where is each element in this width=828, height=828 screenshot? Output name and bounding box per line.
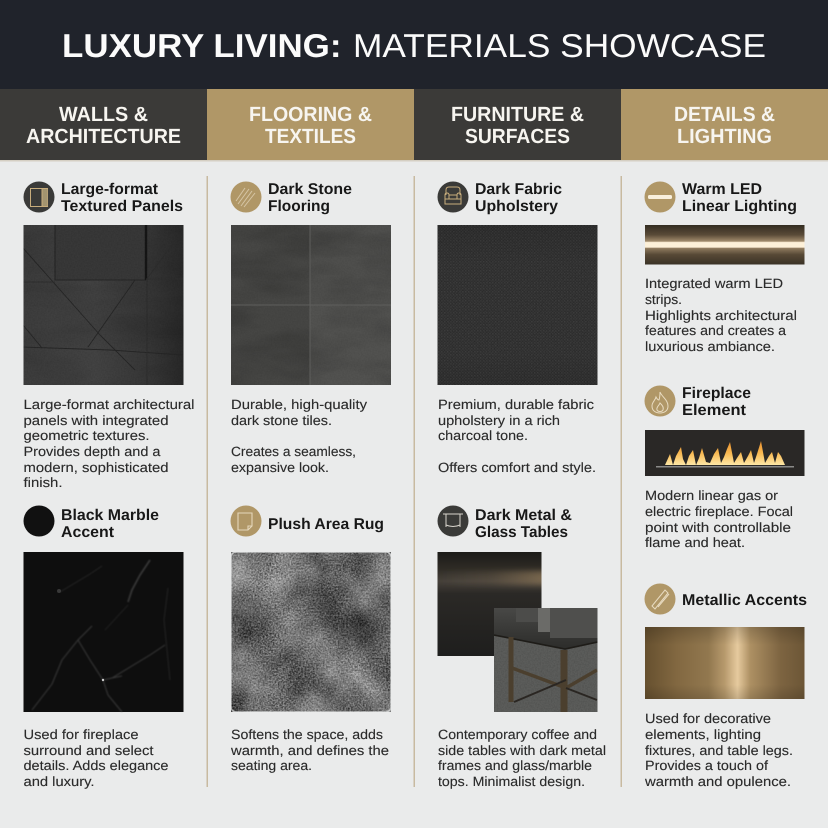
description: point with controllable (645, 520, 791, 535)
description: side tables with dark metal (438, 743, 606, 758)
title: LUXURY LIVING: (62, 27, 342, 64)
description: surround and select (24, 743, 154, 758)
description: seating area. (231, 758, 312, 773)
description: luxurious ambiance. (645, 339, 775, 354)
description (644, 711, 793, 789)
column header: furniture and surfaces (414, 89, 621, 160)
material swatch: dark metal (438, 552, 548, 656)
heading: Textured Panels (61, 198, 183, 215)
column header: flooring and textiles: TEXTILES (265, 125, 356, 148)
description: charcoal tone. (438, 428, 528, 443)
heading (61, 181, 183, 215)
column header: flooring and textiles (207, 89, 414, 160)
heading: Upholstery (475, 198, 558, 215)
panel: warm LED linear lighting (644, 181, 804, 354)
description: Softens the space, adds (231, 727, 383, 742)
heading: Flooring (268, 198, 330, 215)
heading (682, 385, 751, 419)
icon: stone (230, 182, 262, 212)
description (438, 397, 596, 475)
heading: Dark Metal & (475, 507, 572, 524)
description: Used for fireplace (24, 727, 138, 742)
icon: metal rods (644, 584, 676, 614)
column header: flooring and textiles: FLOORING & (249, 103, 372, 126)
description: tops. Minimalist design. (438, 774, 585, 789)
heading: Linear Lighting (682, 198, 797, 215)
description (645, 488, 793, 550)
icon: LED bar (644, 182, 676, 212)
panel: black marble accent (24, 506, 184, 789)
photo: glass table (494, 608, 598, 712)
icon: marble (24, 506, 54, 536)
column header: walls and architecture: WALLS & (59, 103, 148, 126)
column header: furniture and surfaces: SURFACES (465, 125, 570, 148)
description: warmth, and defines the (230, 743, 389, 758)
heading (475, 507, 572, 541)
material swatch: LED strip (645, 225, 804, 264)
material swatch: fabric (438, 225, 598, 385)
description: dark stone tiles. (231, 413, 332, 428)
column header: furniture and surfaces: FURNITURE & (451, 103, 584, 126)
description: Provides a touch of (645, 758, 768, 773)
panel: fireplace element (644, 385, 804, 550)
description: modern, sophisticated (24, 460, 168, 475)
heading: Plush Area Rug (268, 516, 384, 533)
heading: Glass Tables (475, 524, 568, 541)
panel: metallic accents (644, 584, 807, 789)
heading: Element (682, 402, 746, 419)
description: Modern linear gas or (645, 488, 779, 503)
description: Offers comfort and style. (438, 460, 596, 475)
description: Integrated warm LED (645, 276, 783, 291)
panel: large-format textured panels (23, 181, 195, 490)
icon: sofa (438, 182, 468, 212)
description: and luxury. (24, 774, 94, 789)
heading: Metallic Accents (682, 592, 807, 609)
description: Premium, durable fabric (438, 397, 594, 412)
material swatch: rug (231, 552, 391, 712)
material swatch: brushed bronze (645, 627, 804, 699)
description: expansive look. (231, 460, 329, 475)
material swatch: fireplace (645, 430, 804, 476)
column header: details and lighting (621, 89, 828, 160)
description: Creates a seamless, (231, 444, 356, 459)
description: frames and glass/marble (438, 758, 592, 773)
heading (61, 507, 159, 541)
description: Highlights architectural (645, 308, 797, 323)
description: Contemporary coffee and (438, 727, 597, 742)
column header: details and lighting: DETAILS & (674, 103, 775, 126)
description (24, 397, 195, 490)
description: Used for decorative (645, 711, 771, 726)
description (231, 397, 367, 475)
panel: dark stone flooring (230, 181, 391, 475)
description: features and creates a (645, 323, 787, 338)
description: panels with integrated (24, 413, 168, 428)
description: Durable, high-quality (231, 397, 367, 412)
description (24, 727, 168, 789)
title banner (0, 0, 828, 89)
description: strips. (645, 292, 682, 307)
icon: rug (230, 506, 262, 536)
description: upholstery in a rich (438, 413, 560, 428)
title: MATERIALS SHOWCASE (353, 27, 766, 64)
description: electric fireplace. Focal (645, 504, 793, 519)
icon: panel (24, 182, 54, 212)
title (62, 27, 766, 64)
panel: dark metal and glass tables (438, 506, 606, 789)
heading: Accent (61, 524, 114, 541)
heading: Black Marble (61, 507, 159, 524)
heading (268, 181, 352, 215)
description (645, 276, 797, 354)
heading: Dark Fabric (475, 181, 562, 198)
heading: Dark Stone (268, 181, 352, 198)
column header: walls and architecture: ARCHITECTURE (26, 125, 181, 148)
description: Large-format architectural (24, 397, 195, 412)
material swatch: black marble (24, 552, 184, 712)
icon: table (438, 506, 468, 536)
panel: plush area rug (230, 506, 391, 773)
description: flame and heat. (645, 535, 745, 550)
description: elements, lighting (645, 727, 761, 742)
heading: Fireplace (682, 385, 751, 402)
description: details. Adds elegance (24, 758, 168, 773)
description: geometric textures. (24, 428, 150, 443)
column header: details and lighting: LIGHTING (677, 125, 772, 148)
heading: Warm LED (682, 181, 762, 198)
description: warmth and opulence. (644, 774, 791, 789)
description: Provides depth and a (24, 444, 161, 459)
description (438, 727, 606, 789)
material swatch: stone tiles (231, 225, 391, 385)
panel: dark fabric upholstery (438, 181, 598, 475)
description (230, 727, 389, 773)
icon: flame (644, 386, 676, 416)
material swatch: textured panels (23, 225, 184, 385)
description: fixtures, and table legs. (645, 743, 793, 758)
description: finish. (24, 475, 62, 490)
heading: Large-format (61, 181, 158, 198)
column header: walls and architecture (0, 89, 207, 160)
heading (475, 181, 562, 215)
heading (682, 181, 797, 215)
